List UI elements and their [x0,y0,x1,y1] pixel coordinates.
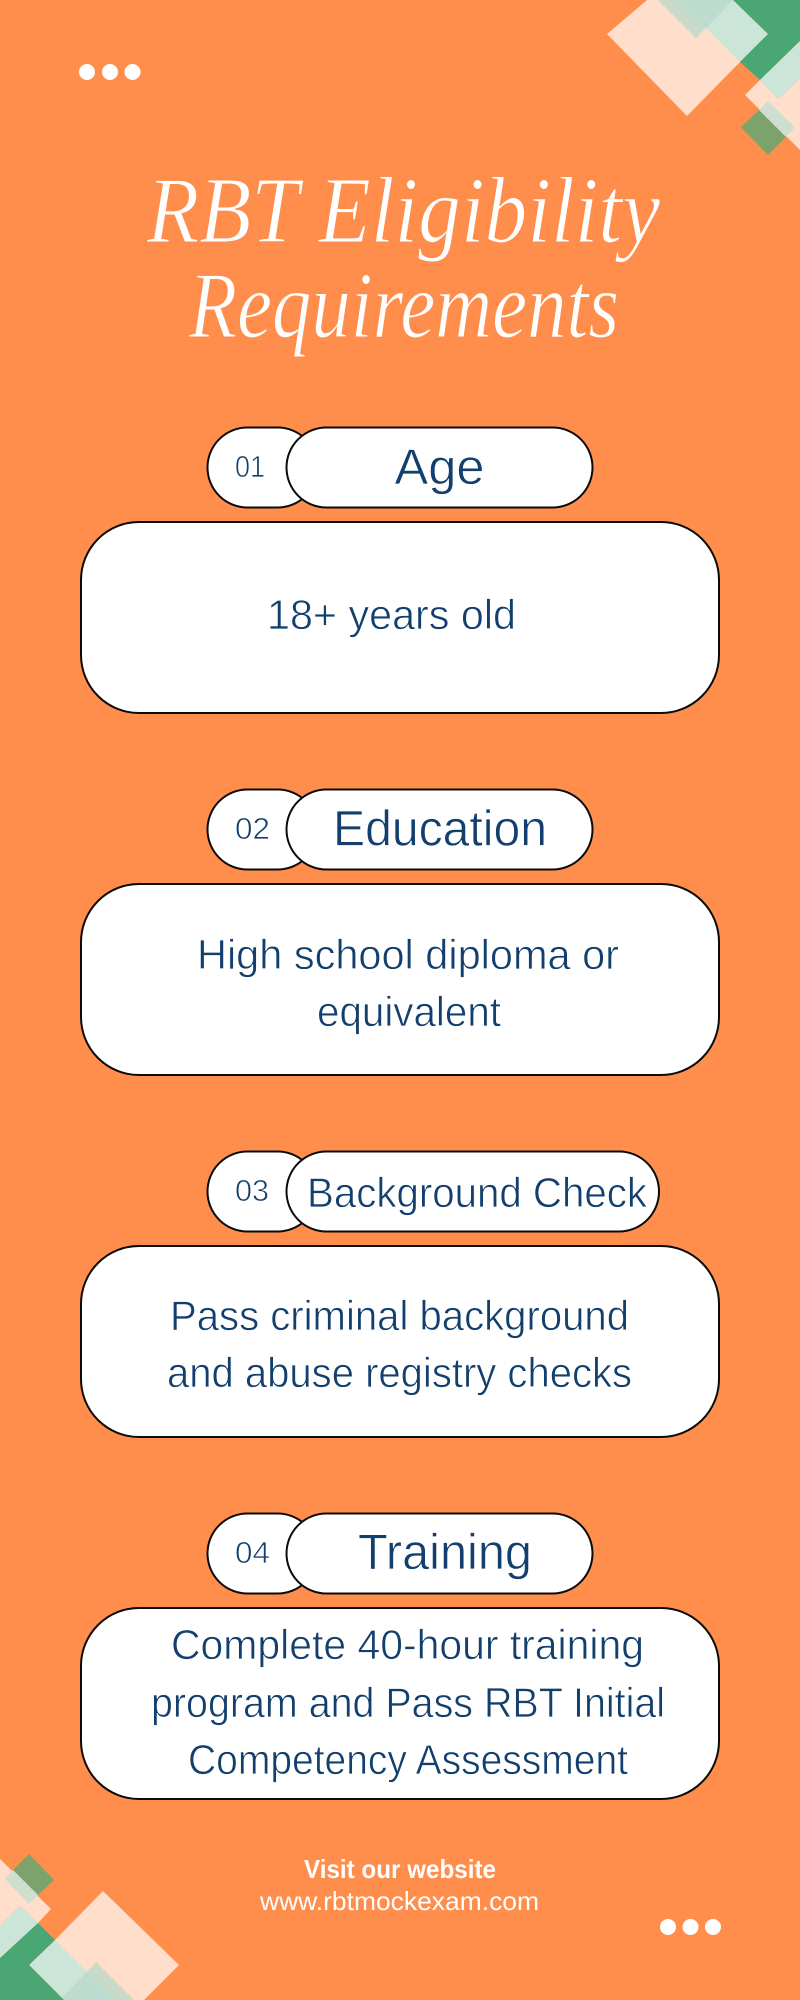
heading pill: Education [286,790,592,870]
panel: training [81,1514,719,1799]
content box: age: 18+ years old [267,591,516,638]
content box: education: High school diploma or [197,931,619,978]
number pill 03: 03 [235,1173,269,1208]
decoration: bottom-left diamonds [0,1854,179,2000]
title [146,159,660,358]
content box: training: Complete 40-hour training [171,1621,644,1668]
panel: education [81,790,719,1075]
content box: background check [81,1246,719,1437]
title: Requirements [188,254,619,358]
footer: website text: www.rbtmockexam.com [259,1886,539,1916]
number pill 04: 04 [235,1535,270,1570]
content box: background check: and abuse registry checks [167,1349,632,1396]
heading pill: Age: Age [394,439,484,495]
heading pill: Training: Training [358,1524,532,1580]
content box: training: Competency Assessment [188,1736,628,1783]
footer: website text [259,1854,539,1916]
footer: website text: Visit our website [304,1854,496,1884]
heading pill: Training [286,1514,592,1594]
number pill 02 [208,790,318,870]
content box: education [81,884,719,1075]
decoration: top-right diamonds [607,0,800,155]
heading pill: Age [286,428,592,508]
number pill 02: 02 [235,811,270,846]
content box: education: equivalent [317,988,501,1035]
heading pill: Background Check [286,1152,659,1232]
content box: background check: Pass criminal background [170,1292,629,1339]
heading pill: Education: Education [333,800,547,856]
content box: training [81,1608,719,1799]
number pill 01: 01 [235,449,265,484]
decoration: top-left dots [79,64,140,80]
number pill 04 [208,1514,318,1594]
number pill 01 [208,428,318,508]
decoration: bottom-right dots [660,1919,721,1935]
panel: background check [81,1152,719,1437]
title: RBT Eligibility [146,159,660,263]
panel: age [81,428,719,713]
number pill 03 [208,1152,318,1232]
content box: age [81,522,719,713]
content box: training: program and Pass RBT Initial [151,1679,665,1726]
heading pill: Background Check: Background Check [307,1169,648,1216]
